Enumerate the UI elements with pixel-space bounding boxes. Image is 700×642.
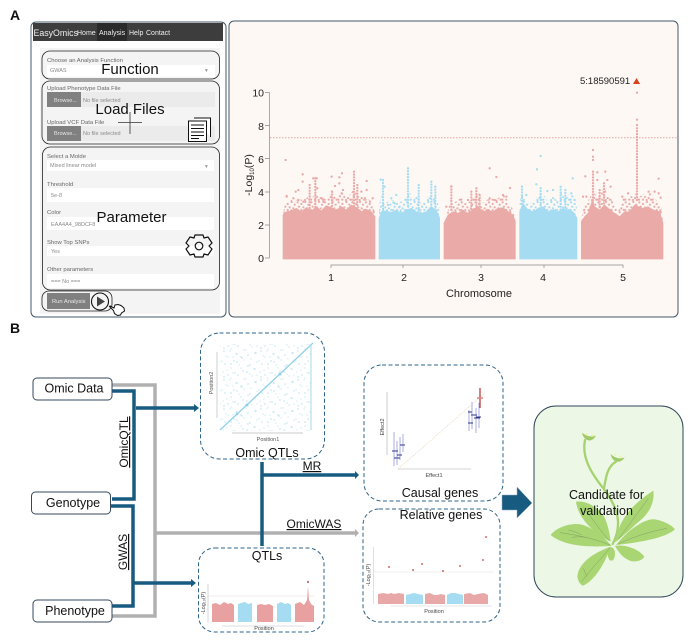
- section: load files: [42, 81, 220, 144]
- panel: Omic QTLs: Omic QTLs: [235, 446, 299, 460]
- top SNP annotation: 5:18590591: [580, 76, 630, 87]
- chart: effect scatter plot: Effect2: [380, 418, 386, 436]
- y axis: 4: [258, 187, 264, 199]
- navigation bar: Contact: [146, 30, 170, 37]
- navigation bar: Analysis: [99, 30, 126, 37]
- y axis: 10: [252, 88, 264, 100]
- section: load files: Browse...: [54, 98, 77, 104]
- arrow: to candidate validation: [502, 487, 532, 518]
- section: parameter: Other parameters: [47, 267, 93, 273]
- input box: genotype: [32, 492, 110, 514]
- panel: causal genes: Causal genes: [402, 486, 478, 500]
- y axis: 2: [258, 220, 264, 232]
- section: function: [42, 51, 220, 79]
- input box: phenotype: [33, 600, 112, 622]
- section: parameter: Parameter: [96, 209, 167, 226]
- section: parameter: Color: [47, 210, 61, 216]
- section: parameter: Mixed linear model: [50, 163, 96, 169]
- section: function: Function: [101, 61, 159, 78]
- label: OmicWAS: OmicWAS: [287, 517, 341, 531]
- section: load files: Upload VCF Data File: [47, 120, 105, 126]
- section: parameter: Yes: [51, 249, 60, 255]
- panel: Omic QTLs: [200, 333, 324, 460]
- section: function: GWAS: [50, 68, 67, 74]
- panel label A: A: [10, 7, 20, 23]
- icon: documents: [188, 118, 210, 142]
- chart: effect scatter plot: Effect1: [425, 473, 443, 479]
- icon: pointer hand: [110, 304, 124, 316]
- y axis: 6: [258, 154, 264, 166]
- section: load files: No file selected: [83, 131, 121, 137]
- y axis: 8: [258, 121, 264, 133]
- chart: mini manhattan plot: Position: [254, 626, 274, 632]
- section: run analysis: [42, 291, 124, 316]
- x axis: 2: [401, 272, 407, 284]
- chart: dot plot of position1 vs position2: [209, 343, 313, 443]
- y axis: (P): [243, 154, 255, 168]
- navigation bar: EasyOmics: [34, 28, 79, 38]
- navigation bar: Help: [129, 30, 144, 37]
- x axis: [328, 265, 626, 300]
- flower buds: [582, 433, 625, 462]
- y axis: [243, 88, 270, 265]
- workflow: blue QTL connectors: [111, 391, 359, 606]
- chart: genome-wide association points: [283, 93, 663, 259]
- chart: dot plot of position1 vs position2: Position2: [209, 372, 215, 394]
- panel: candidate for validation: validation: [580, 504, 633, 518]
- chart: mini OmicWAS manhattan plot: Position: [424, 609, 444, 615]
- panel: candidate for validation: Candidate for: [569, 488, 644, 502]
- significance threshold line: [270, 137, 677, 139]
- chart: mini manhattan plot: [201, 581, 314, 632]
- label: MR: MR: [303, 459, 322, 473]
- navigation bar: [33, 23, 223, 41]
- x axis: 3: [478, 272, 484, 284]
- panel: software interface: [31, 22, 226, 317]
- label: GWAS: GWAS: [116, 534, 130, 570]
- panel label B: B: [10, 320, 20, 336]
- chart: mini OmicWAS manhattan plot: -Log₁₀(P): [366, 564, 372, 586]
- section: function: Choose an Analysis Function: [47, 58, 123, 64]
- section: parameter: Threshold: [47, 182, 73, 188]
- chart: effect scatter plot: [380, 388, 485, 479]
- input box: omic data: [33, 378, 112, 400]
- panel: relative genes: [363, 508, 500, 622]
- x axis: Chromosome: [446, 288, 512, 300]
- x axis: 5: [620, 272, 626, 284]
- section: load files: Upload Phenotype Data File: [47, 86, 121, 92]
- navigation bar: Home: [77, 30, 96, 37]
- panel: QTLs: [198, 548, 324, 632]
- section: parameter: ▾: [205, 164, 208, 170]
- icon: plant: [551, 433, 675, 586]
- section: load files: Load Files: [95, 101, 165, 118]
- workflow: grey OmicWAS connectors: [112, 385, 359, 616]
- label: OmicQTL: OmicQTL: [117, 416, 131, 468]
- input box: genotype: Genotype: [46, 496, 100, 510]
- chart: mini OmicWAS manhattan plot: [366, 536, 494, 615]
- x axis: 4: [540, 272, 546, 284]
- chart: dot plot of position1 vs position2: Position1: [257, 437, 279, 443]
- section: parameter: 5e-8: [51, 193, 62, 199]
- panel: QTLs: QTLs: [252, 549, 282, 563]
- icon: gear: [186, 235, 212, 257]
- chart: mini manhattan plot: -Log₁₀(P): [201, 592, 207, 614]
- panel: candidate for validation: [534, 406, 683, 597]
- x axis: 1: [328, 272, 334, 284]
- section: function: ▾: [205, 68, 208, 74]
- y axis: -Log: [243, 175, 255, 196]
- section: parameter: EAA4A4_98DCF8: [51, 222, 95, 228]
- section: parameter: Show Top SNPs: [47, 240, 90, 246]
- section: parameter: Select a Molde: [47, 154, 87, 160]
- section: load files: Browse...: [54, 131, 77, 137]
- section: parameter: === No ===: [51, 279, 80, 285]
- section: run analysis: Run Analysis: [52, 299, 86, 305]
- panel: relative genes: Relative genes: [400, 508, 482, 522]
- y axis: 0: [258, 253, 264, 265]
- panel: causal genes: [364, 365, 503, 501]
- icon: play button: [92, 293, 108, 310]
- panel: manhattan plot: [229, 21, 678, 317]
- input box: omic data: Omic Data: [44, 382, 104, 396]
- y axis: 10: [250, 167, 256, 175]
- input box: phenotype: Phenotype: [45, 604, 105, 618]
- section: load files: No file selected: [83, 98, 121, 104]
- section: parameter: [42, 147, 220, 290]
